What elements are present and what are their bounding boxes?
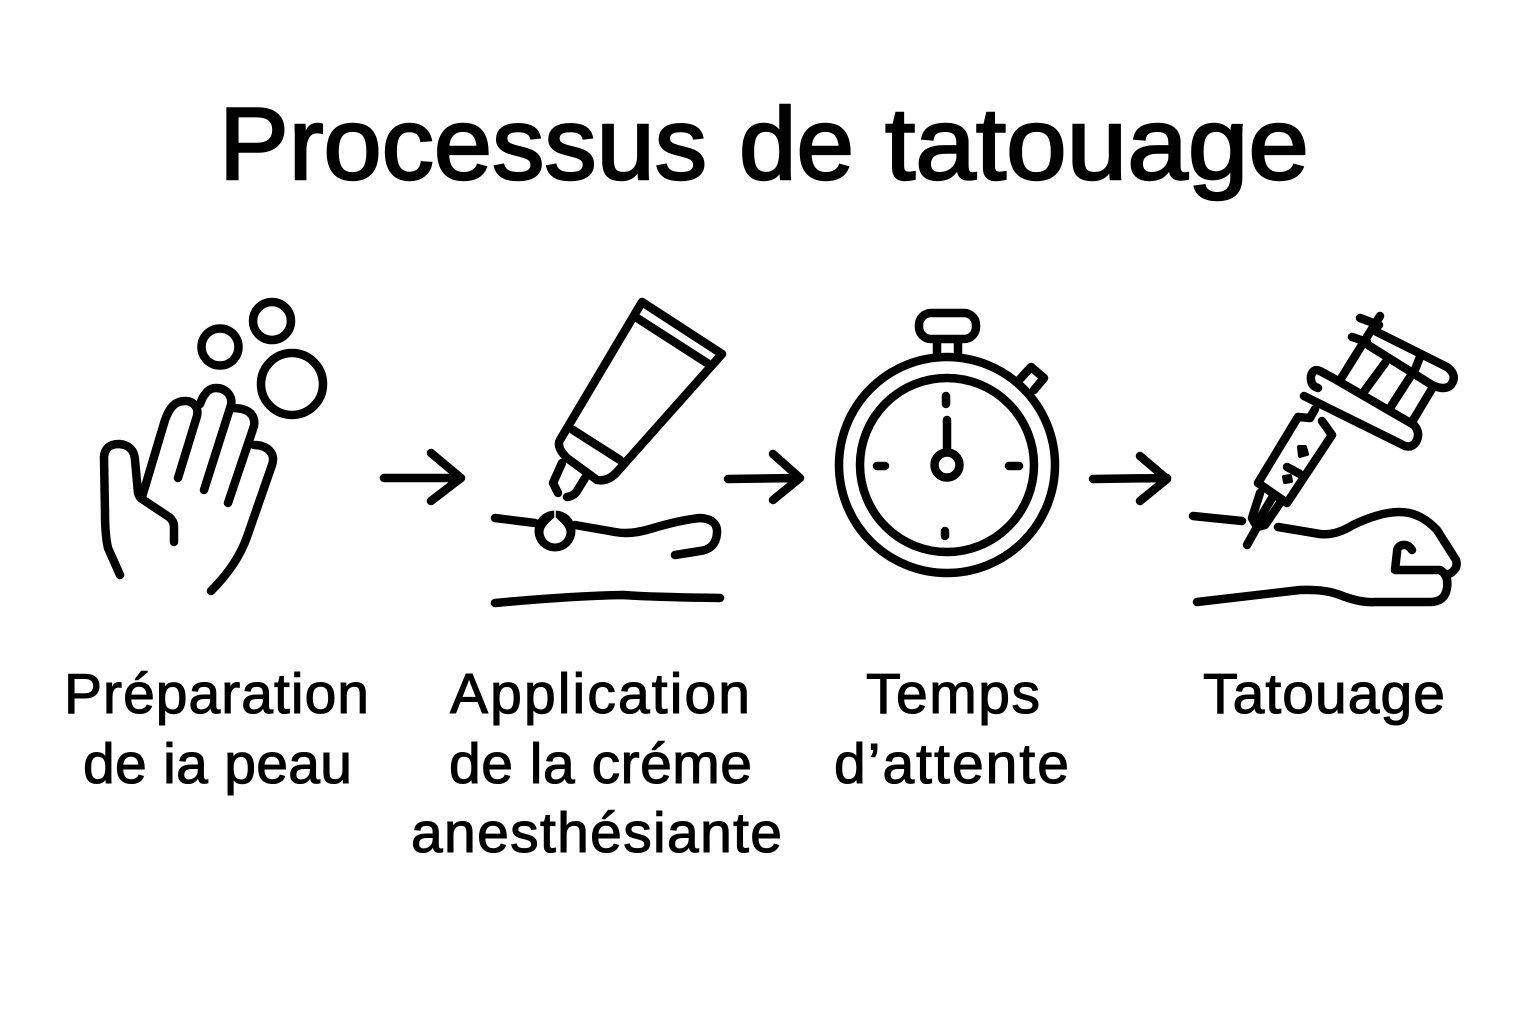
title: tatouage xyxy=(885,87,1309,201)
label: step 2: de la créme xyxy=(449,732,752,796)
label: step 1: de ia peau xyxy=(83,732,352,796)
icon: tattoo machine and arm xyxy=(1193,316,1457,602)
label: step 2: anesthésiante xyxy=(411,801,782,865)
label: step 2 xyxy=(411,662,782,865)
title xyxy=(219,87,1309,201)
label: step 3: Temps xyxy=(866,662,1040,726)
title: de xyxy=(739,87,854,201)
label: step 1 xyxy=(64,662,369,796)
label: step 1: Préparation xyxy=(64,662,369,726)
label: step 3: d’attente xyxy=(834,732,1069,796)
icon: washing hand with bubbles xyxy=(104,302,323,591)
label: step 2: Application xyxy=(450,662,750,726)
arrow 2 xyxy=(728,454,800,500)
arrow 3 xyxy=(1093,456,1167,501)
arrow 1 xyxy=(384,453,461,501)
title: Processus xyxy=(219,87,707,201)
icon: stopwatch xyxy=(839,313,1055,573)
icon: cream tube and arm xyxy=(495,302,722,603)
label: step 3 xyxy=(834,662,1069,796)
label: step 4: Tatouage xyxy=(1203,662,1445,726)
